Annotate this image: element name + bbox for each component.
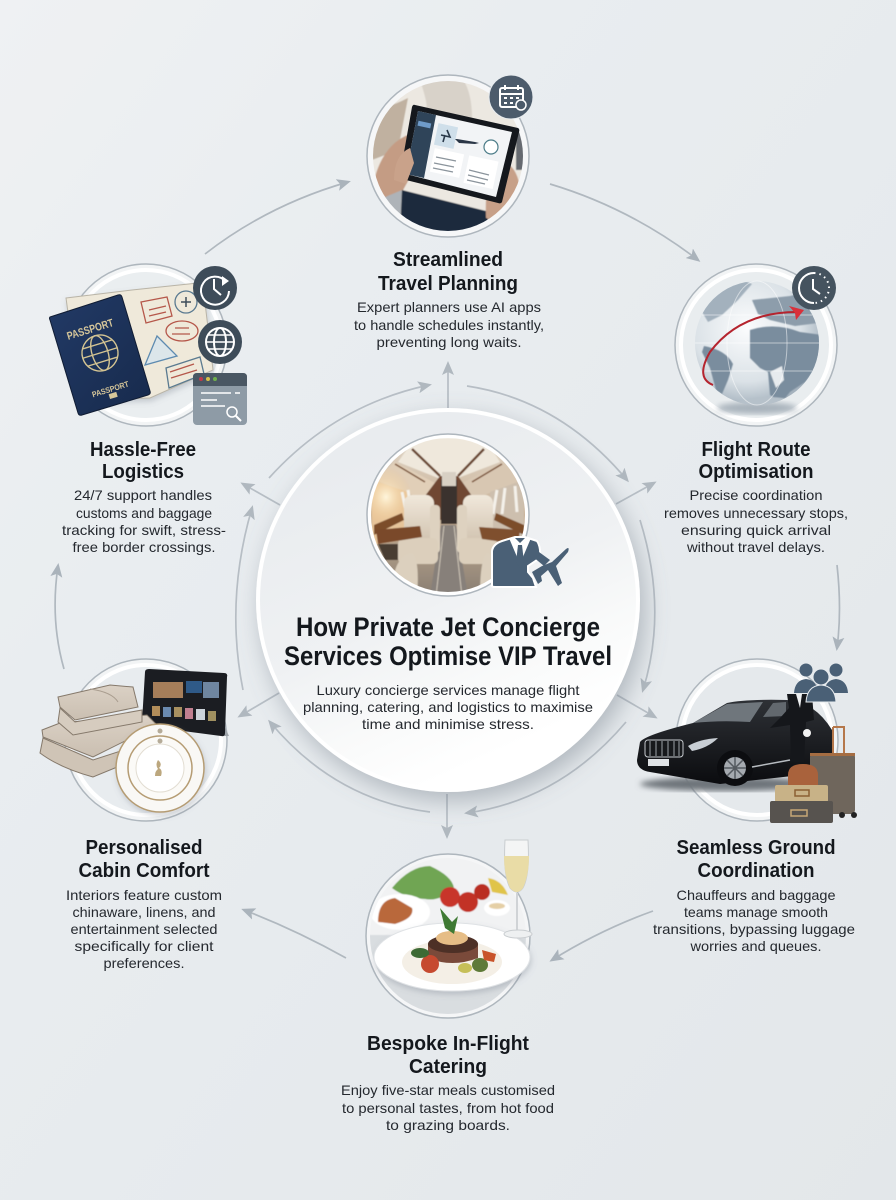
photo: tablet in hands <box>367 75 529 237</box>
heading <box>378 249 518 295</box>
ring <box>65 264 227 426</box>
passport cover: PASSPORT <box>91 380 130 399</box>
icon: suit and plane <box>492 537 569 587</box>
icon: team group <box>794 664 848 702</box>
description <box>66 887 222 971</box>
description: worries and queues. <box>689 938 822 954</box>
heading: Cabin Comfort <box>78 860 210 882</box>
folded linens <box>40 685 157 777</box>
heading: Seamless Ground <box>676 837 836 859</box>
heading: Bespoke In-Flight <box>367 1033 529 1055</box>
description: free border crossings. <box>72 539 216 555</box>
heading: Personalised <box>86 837 202 859</box>
title <box>284 612 612 671</box>
description <box>664 487 848 555</box>
icon: calendar badge <box>489 75 533 119</box>
outer cycle arrows <box>55 182 840 960</box>
photo: globe <box>695 278 826 414</box>
hub description: Luxury concierge services manage flight <box>316 682 580 698</box>
heading: Optimisation <box>698 461 814 483</box>
heading: Streamlined <box>393 249 503 271</box>
description: tracking for swift, stress- <box>62 522 226 538</box>
description: teams manage smooth <box>684 904 828 920</box>
description <box>62 487 226 555</box>
heading: Coordination <box>698 860 814 882</box>
heading <box>367 1033 529 1078</box>
open passport pages <box>66 283 213 400</box>
description: preferences. <box>104 955 184 971</box>
ring <box>675 264 837 426</box>
centre photo: jet cabin <box>360 434 529 596</box>
description: ensuring quick arrival <box>681 522 831 538</box>
heading: Catering <box>409 1056 487 1078</box>
title: Services Optimise VIP Travel <box>284 641 612 671</box>
luggage <box>770 727 857 823</box>
description: entertainment selected <box>70 921 218 937</box>
chauffeur <box>770 694 814 762</box>
hub description: time and minimise stress. <box>362 716 534 732</box>
description: 24/7 support handles <box>74 487 212 503</box>
description: Precise coordination <box>690 487 822 503</box>
passport cover: PASSPORT <box>66 317 115 343</box>
description: specifically for client <box>74 938 214 954</box>
panel: streamlined travel planning <box>354 75 544 350</box>
panel: seamless ground coordination <box>637 659 857 954</box>
description <box>354 299 544 350</box>
heading: Flight Route <box>702 439 810 461</box>
hub description: planning, catering, and logistics to maximise <box>303 699 593 715</box>
description: to grazing boards. <box>386 1117 510 1133</box>
icon: globe badge <box>198 320 242 364</box>
heading <box>698 439 814 483</box>
heading <box>676 837 836 882</box>
tablet device <box>400 105 519 203</box>
heading: Travel Planning <box>378 273 518 295</box>
description <box>653 887 855 954</box>
description: Expert planners use AI apps <box>357 299 541 315</box>
passport cover <box>50 295 150 415</box>
icon: browser search <box>193 373 247 425</box>
description <box>341 1082 555 1133</box>
photo: limousine <box>637 700 832 791</box>
heading <box>78 837 210 882</box>
description: to personal tastes, from hot food <box>342 1100 554 1116</box>
icon: clock refresh badge <box>193 266 237 310</box>
panel: bespoke in-flight catering <box>341 840 555 1133</box>
description: preventing long waits. <box>376 334 522 350</box>
heading: Logistics <box>102 461 184 483</box>
ring <box>676 659 838 821</box>
left hand thumb <box>394 148 414 184</box>
hub description <box>303 682 593 732</box>
description: without travel delays. <box>686 539 825 555</box>
description: transitions, bypassing luggage <box>653 921 855 937</box>
icon: clock badge <box>792 266 836 310</box>
red route arrow <box>703 306 804 385</box>
inner ring arrows around hub <box>236 364 655 836</box>
description: customs and baggage <box>76 505 212 521</box>
central hub disc <box>256 408 640 792</box>
description: to handle schedules instantly, <box>354 317 544 333</box>
panel: flight route optimisation <box>664 264 848 555</box>
heading: Hassle-Free <box>90 439 196 461</box>
champagne glass <box>504 840 532 938</box>
description: Chauffeurs and baggage <box>676 887 836 903</box>
panel: personalised cabin comfort <box>40 659 229 971</box>
tablet entertainment <box>142 669 229 736</box>
panel: hassle-free logistics <box>50 264 247 555</box>
heading <box>90 439 196 483</box>
description: Enjoy five-star meals customised <box>341 1082 555 1098</box>
description: chinaware, linens, and <box>72 904 216 920</box>
title: How Private Jet Concierge <box>296 612 600 642</box>
description: removes unnecessary stops, <box>664 505 848 521</box>
photo: gourmet plate <box>366 854 530 1018</box>
ring <box>65 659 227 821</box>
chinaware plates <box>116 724 204 812</box>
description: Interiors feature custom <box>66 887 222 903</box>
